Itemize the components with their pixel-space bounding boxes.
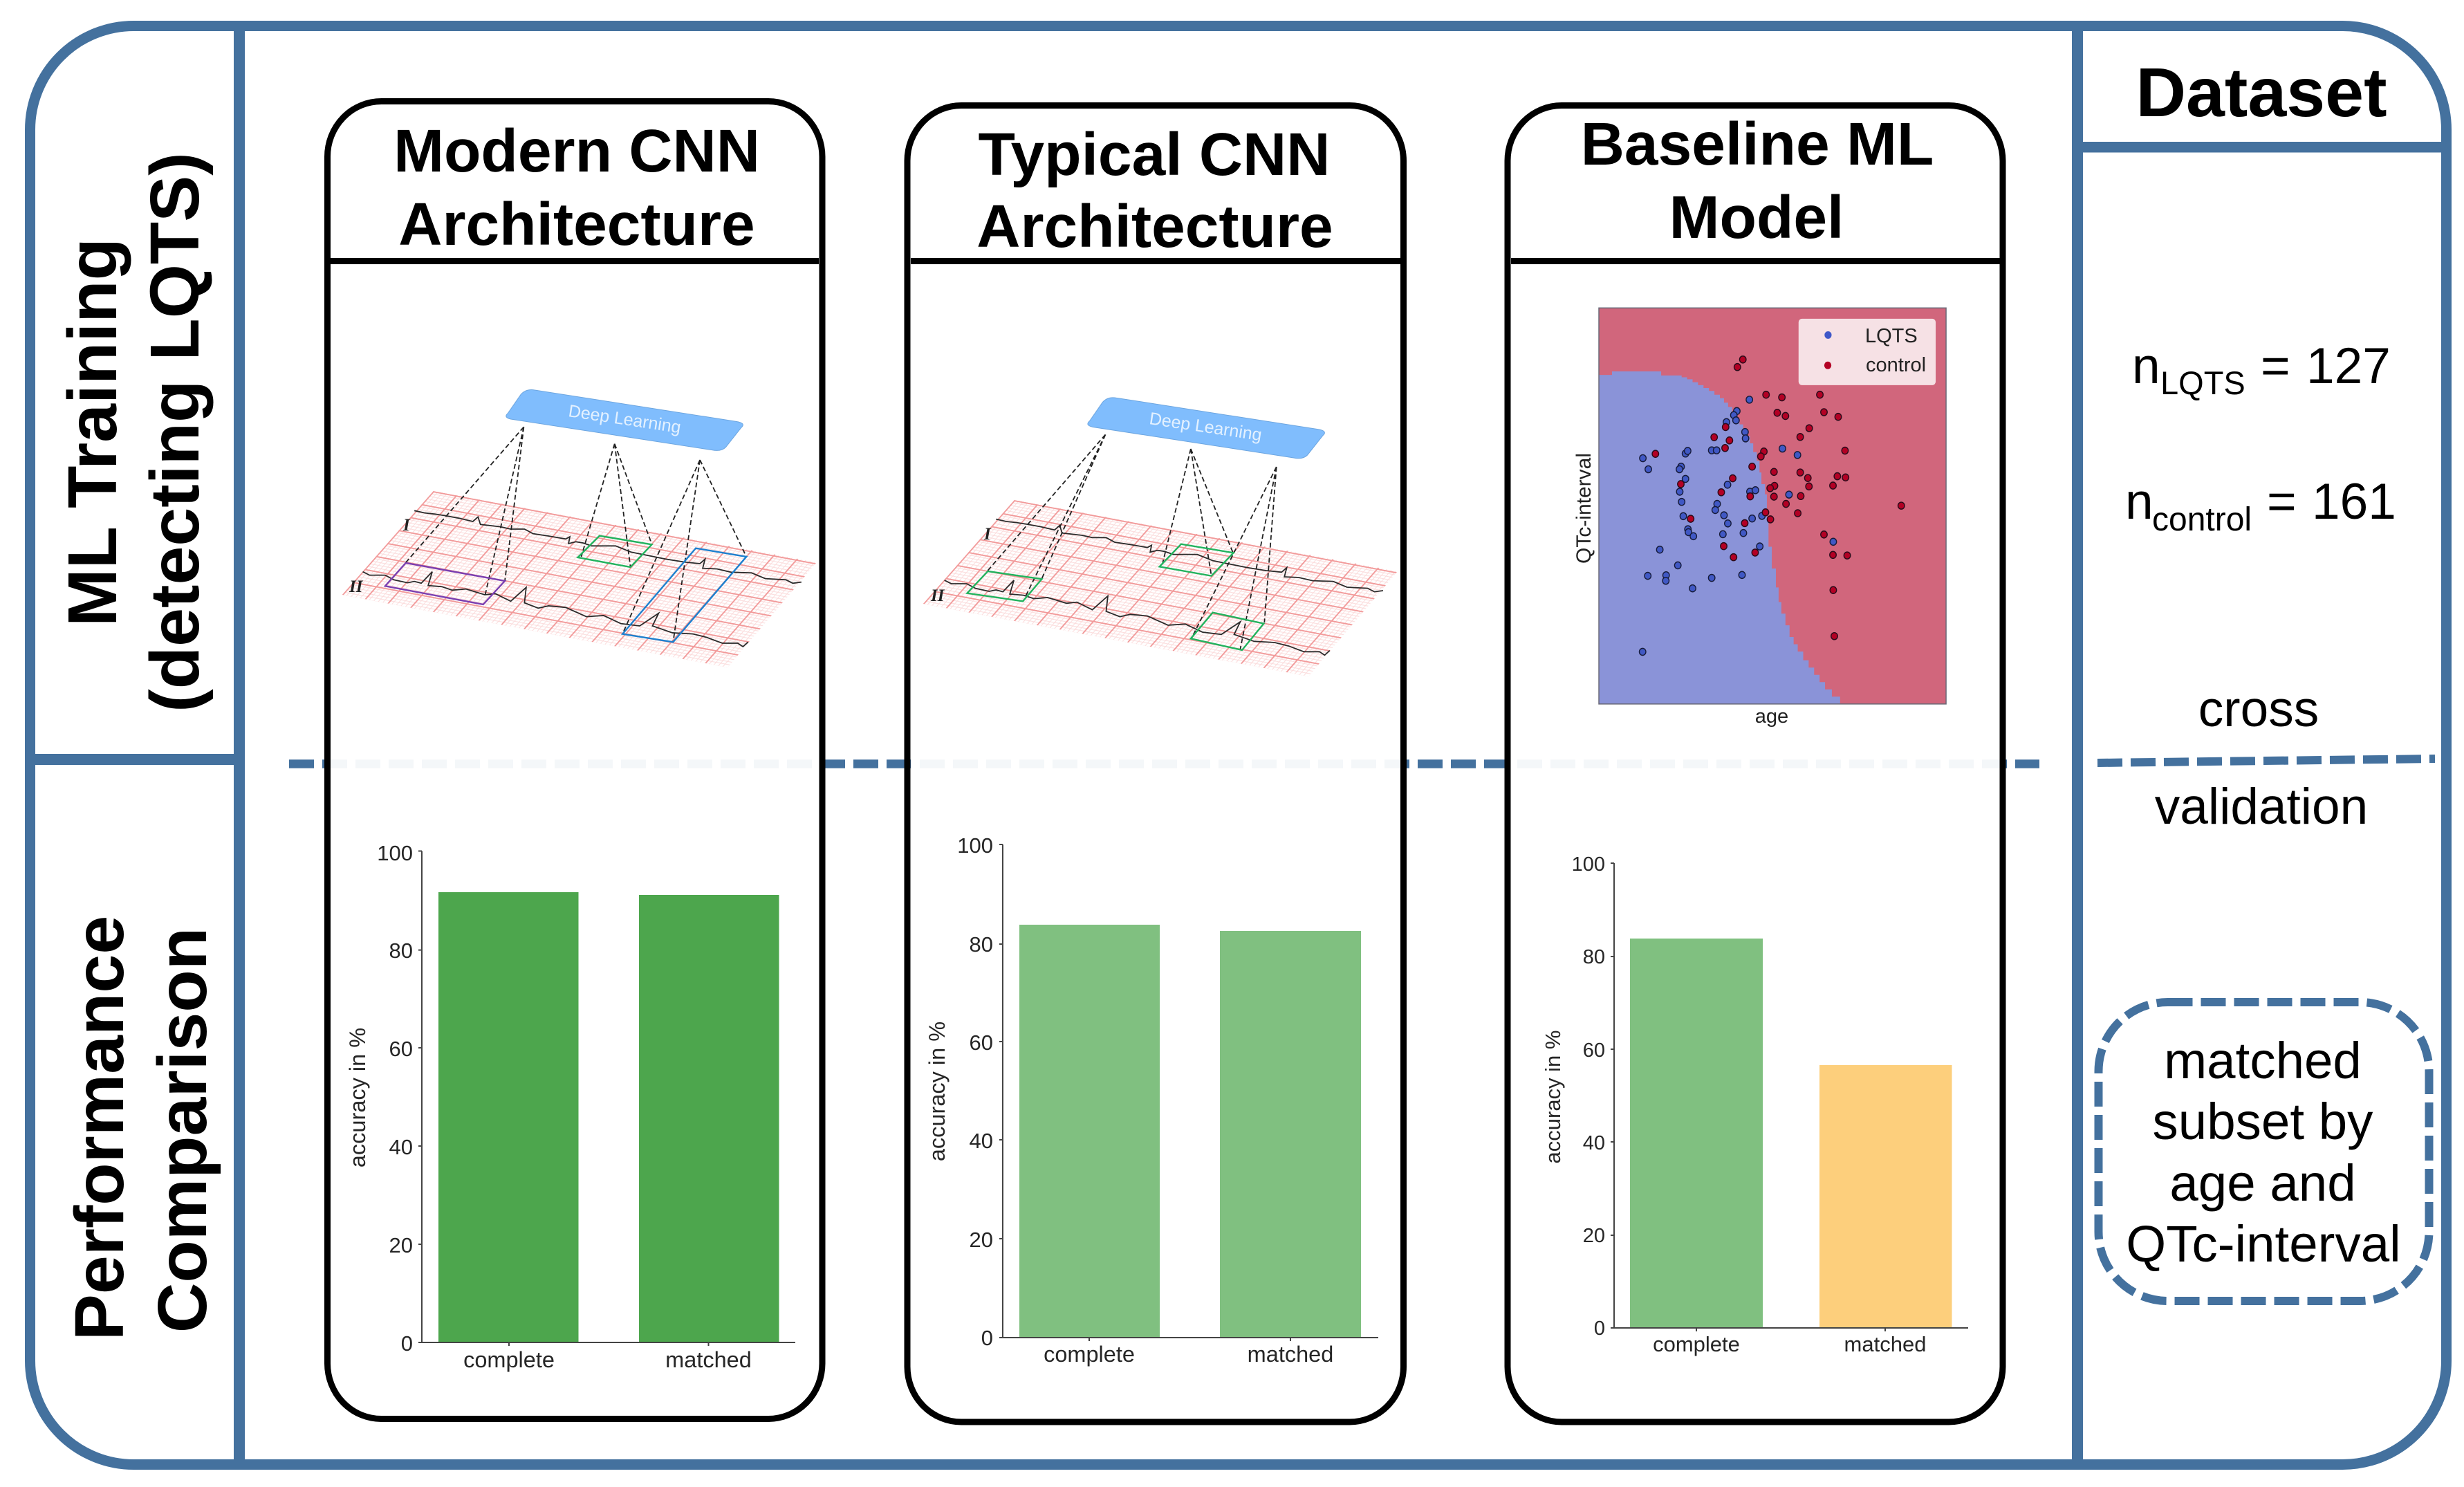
LQTS points	[1639, 396, 1837, 656]
bar: matched	[639, 895, 779, 1342]
header rule	[911, 258, 1400, 264]
sample count: control: control	[2152, 501, 2252, 538]
horizontal dashed separator between training and comparison rows	[289, 758, 2039, 770]
sample count: LQTS: n	[2132, 338, 2160, 394]
panel heading	[393, 117, 760, 258]
purple window	[385, 563, 505, 604]
sample count: LQTS: 127	[2306, 338, 2391, 394]
left column divider	[234, 26, 245, 1465]
legend box	[1799, 319, 1936, 385]
lead labels: I	[402, 516, 411, 535]
y tick labels: 0	[981, 1326, 993, 1350]
illustration: ECG grid with fixed-size windows	[923, 398, 1398, 676]
y tick labels: 100	[1572, 853, 1605, 876]
callout: matched subset	[2098, 1002, 2429, 1301]
illustration: ECG grid with variable-size windows	[342, 389, 817, 667]
header rule	[1511, 258, 2000, 264]
green window: lead II left	[967, 571, 1041, 601]
y axis title: accuracy in %	[925, 1022, 950, 1161]
Deep Learning banner shape	[506, 389, 743, 450]
axes	[999, 844, 1378, 1341]
sample count: control: =	[2267, 474, 2297, 530]
ECG paper grid	[342, 491, 817, 667]
panel heading	[1581, 110, 1934, 251]
sample count: control: n	[2125, 474, 2153, 530]
blue window	[622, 548, 746, 642]
y tick labels: 60	[970, 1031, 993, 1055]
y tick labels: 100	[957, 833, 993, 858]
row heading: ML Training (detecting LQTS): ML Training	[54, 238, 131, 627]
x labels: complete	[1044, 1342, 1135, 1367]
panel: Typical CNN Architecture	[907, 105, 1404, 1422]
dashed projection lines	[406, 427, 746, 642]
bar: complete	[1019, 925, 1160, 1338]
panel heading: Modern CNN	[393, 117, 760, 185]
y tick labels: 80	[389, 939, 413, 963]
row heading: Performance Comparison	[61, 916, 221, 1340]
y axis title: QTc-interval	[1573, 453, 1595, 564]
y tick labels: 80	[1583, 946, 1605, 968]
lead labels: II	[349, 578, 364, 596]
x labels: matched	[1248, 1342, 1333, 1367]
lead labels: I	[983, 525, 992, 544]
axes	[418, 851, 795, 1346]
bar: matched	[1220, 931, 1361, 1338]
plot border	[1599, 308, 1946, 704]
panel: Modern CNN Architecture	[328, 101, 822, 1419]
y tick labels	[957, 833, 993, 1350]
callout: matched subset: subset by	[2153, 1093, 2373, 1150]
legend labels: LQTS	[1865, 325, 1918, 347]
panel heading	[976, 120, 1333, 260]
callout: matched subset: QTc-interval	[2126, 1215, 2401, 1273]
lead labels	[930, 525, 992, 605]
banner label: Deep Learning	[1148, 409, 1263, 445]
sample count: LQTS	[2132, 338, 2391, 401]
ECG paper grid	[923, 500, 1398, 676]
panel: Dataset	[2097, 54, 2435, 1301]
dataset heading: Dataset	[2136, 54, 2387, 131]
cross validation label and dashed line: cross	[2198, 681, 2319, 737]
lead labels	[349, 516, 411, 596]
row heading: Performance Comparison: Performance	[61, 916, 138, 1340]
panel heading: Architecture	[398, 190, 755, 258]
control points	[1652, 356, 1905, 640]
right column divider	[2072, 26, 2083, 1465]
row heading: ML Training (detecting LQTS): (detecting LQTS)	[136, 152, 214, 712]
callout: matched subset: matched	[2164, 1032, 2362, 1089]
dataset header divider	[2083, 142, 2443, 152]
x labels: matched	[1844, 1332, 1926, 1356]
callout: matched subset: age and	[2169, 1154, 2356, 1212]
x labels	[1044, 1342, 1333, 1367]
ECG traces	[363, 510, 802, 647]
banner label: Deep Learning	[567, 401, 682, 437]
ECG traces	[945, 519, 1383, 655]
x labels: matched	[665, 1347, 752, 1372]
bar: complete	[1630, 939, 1763, 1328]
dashed projection lines	[987, 434, 1277, 649]
y tick labels: 40	[1583, 1132, 1605, 1154]
x labels: complete	[463, 1347, 555, 1372]
legend labels	[1865, 325, 1926, 376]
panel heading: Architecture	[976, 192, 1333, 260]
panel heading: Baseline ML	[1581, 110, 1934, 178]
y tick labels: 20	[970, 1228, 993, 1252]
green window: lead I	[1160, 544, 1234, 576]
panel heading: Typical CNN	[979, 120, 1330, 188]
sample count: LQTS: LQTS	[2160, 364, 2245, 401]
y tick labels: 0	[401, 1331, 413, 1356]
control region	[1599, 308, 1946, 704]
green window	[578, 536, 651, 567]
y tick labels: 60	[1583, 1040, 1605, 1062]
bar chart: typical CNN accuracy	[925, 833, 1378, 1367]
panel heading: Model	[1669, 183, 1844, 251]
panel frame	[1508, 105, 2003, 1422]
y tick labels	[377, 841, 413, 1356]
axes	[1611, 863, 1968, 1331]
bar: matched	[1819, 1065, 1952, 1328]
legend marker control	[1824, 362, 1831, 369]
x labels	[463, 1347, 752, 1372]
bar: complete	[438, 892, 578, 1342]
sample count: LQTS: =	[2261, 338, 2290, 394]
cross validation label and dashed line: validation	[2155, 779, 2368, 835]
x labels	[1653, 1332, 1926, 1356]
bar chart: baseline ML accuracy	[1541, 853, 1968, 1356]
y tick labels: 80	[970, 932, 993, 957]
x labels: complete	[1653, 1332, 1740, 1356]
header rule	[331, 258, 819, 264]
y axis title: accuracy in %	[1541, 1031, 1565, 1163]
row heading: ML Training (detecting LQTS)	[54, 152, 214, 712]
scatter plot with decision boundary	[1573, 308, 1946, 728]
y tick labels: 20	[389, 1233, 413, 1257]
panel frame	[328, 101, 822, 1419]
green window: lead II right	[1191, 613, 1263, 650]
sample count: control: 161	[2312, 474, 2396, 530]
y tick labels	[1572, 853, 1605, 1340]
y tick labels: 60	[389, 1037, 413, 1061]
cross validation label and dashed line	[2097, 681, 2435, 835]
lead labels: II	[930, 587, 945, 605]
x axis title: age	[1755, 705, 1788, 728]
sample count: control	[2125, 474, 2396, 538]
y axis title: accuracy in %	[345, 1028, 370, 1167]
panel: Baseline ML Model	[1508, 105, 2003, 1422]
legend labels: control	[1866, 354, 1926, 376]
bar chart: modern CNN accuracy	[345, 841, 795, 1372]
y tick labels: 100	[377, 841, 413, 865]
panel frame	[907, 105, 1404, 1422]
Deep Learning banner shape	[1088, 398, 1324, 459]
LQTS region	[1599, 371, 1840, 704]
row heading: Performance Comparison: Comparison	[144, 927, 221, 1333]
y tick labels: 0	[1594, 1318, 1605, 1340]
y tick labels: 40	[389, 1135, 413, 1159]
legend marker LQTS	[1824, 331, 1832, 339]
left column horizontal divider	[30, 754, 234, 765]
y tick labels: 40	[970, 1129, 993, 1153]
y tick labels: 20	[1583, 1225, 1605, 1247]
